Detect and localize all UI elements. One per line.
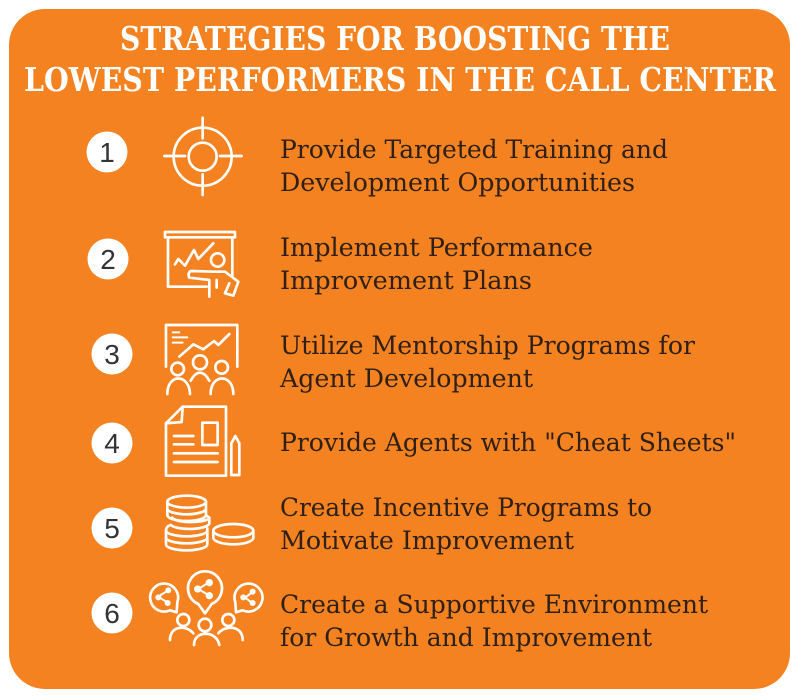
item 4	[92, 407, 736, 476]
text: item 1: Provide Targeted Training and	[280, 135, 668, 165]
icon: coins	[166, 496, 253, 550]
number badge 5: 5	[104, 513, 120, 544]
icon: document and pencil	[166, 407, 239, 476]
number badge 6: 6	[104, 598, 120, 629]
text: item 5: Create Incentive Programs to	[280, 493, 652, 523]
text: item 1: Development Opportunities	[280, 168, 635, 198]
text: item 2: Improvement Plans	[280, 266, 532, 296]
text: item 3: Utilize Mentorship Programs for	[280, 331, 696, 361]
text: item 2: Implement Performance	[280, 233, 593, 263]
number badge 1	[86, 132, 128, 172]
item 1	[86, 118, 668, 198]
icon: target	[164, 118, 242, 195]
text: item 4: Provide Agents with "Cheat Sheets"	[280, 428, 736, 458]
number badge 3	[92, 334, 132, 374]
number badge 4: 4	[104, 428, 120, 459]
number badge 5	[92, 508, 132, 548]
text: item 1	[280, 135, 668, 198]
icon: people sharing	[150, 571, 262, 645]
text: item 6: for Growth and Improvement	[280, 623, 653, 653]
item 6	[92, 571, 709, 653]
text: item 2	[280, 233, 593, 296]
item 3	[92, 325, 696, 394]
number badge 4	[92, 422, 132, 464]
number badge 2	[88, 238, 128, 280]
item 2	[88, 232, 593, 297]
icon: team with chart	[166, 325, 237, 394]
number badge 6	[92, 592, 132, 634]
text: item 3	[279, 331, 696, 394]
text: item 5: Motivate Improvement	[280, 526, 575, 556]
text: item 6: Create a Supportive Environment	[280, 590, 709, 620]
title: STRATEGIES FOR BOOSTING THE	[120, 19, 670, 58]
number badge 3: 3	[104, 339, 120, 370]
number badge 1: 1	[99, 137, 115, 168]
icon: presentation board	[165, 232, 238, 297]
text: item 5	[280, 493, 652, 556]
number badge 2: 2	[100, 244, 116, 275]
item 5	[92, 493, 652, 556]
text: item 3: Agent Development	[279, 364, 534, 394]
title	[24, 19, 776, 99]
text: item 6	[280, 590, 709, 653]
